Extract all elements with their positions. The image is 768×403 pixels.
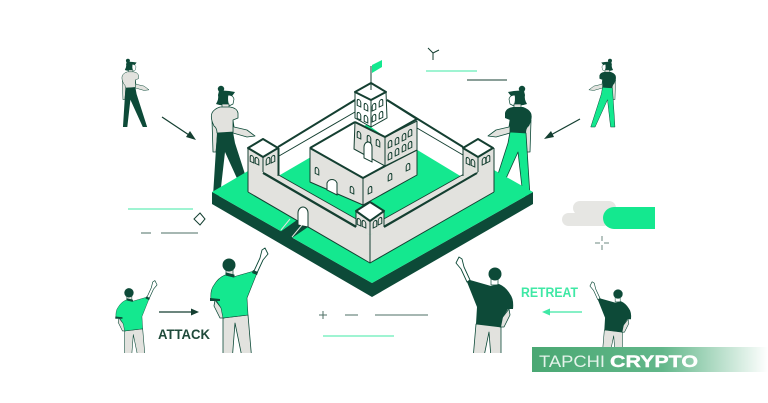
gate and ramp: [280, 207, 308, 238]
watermark banner: CRYPTO: [610, 352, 698, 371]
keep windows: [315, 99, 412, 195]
arrow: retreat: [542, 308, 582, 316]
corner towers: [248, 139, 494, 263]
large woman left: [211, 86, 255, 196]
back walls: [278, 100, 463, 176]
arrow: attack: [159, 308, 199, 316]
decoration: cross: [595, 236, 609, 250]
keep: [310, 83, 417, 205]
label: attack: ATTACK: [158, 327, 210, 342]
decoration: clouds and pill: [562, 201, 655, 229]
arrow: right woman toward castle: [544, 119, 580, 139]
watermark text: TAPCHI: [539, 352, 605, 371]
large man left: [210, 248, 268, 362]
bottom mask: [100, 353, 540, 403]
small man right: [590, 282, 631, 364]
small woman left: [122, 59, 149, 127]
platform top: [212, 122, 533, 283]
label: retreat: RETREAT: [521, 285, 579, 300]
tower windows: [250, 155, 490, 228]
decoration: left lines and diamond: [128, 209, 205, 233]
front walls and tower bodies: [248, 150, 494, 263]
decoration: bottom lines: [319, 311, 428, 336]
small man left: [115, 281, 157, 363]
watermark banner: [532, 347, 768, 372]
large man right: [456, 257, 513, 371]
large woman right: [488, 86, 532, 196]
castle on platform: [212, 60, 533, 297]
small woman right: [589, 59, 616, 127]
decoration: top right sprig and lines: [426, 48, 507, 80]
flag: [371, 60, 382, 90]
platform base: [212, 192, 533, 297]
arrow: left woman toward castle: [162, 117, 196, 140]
